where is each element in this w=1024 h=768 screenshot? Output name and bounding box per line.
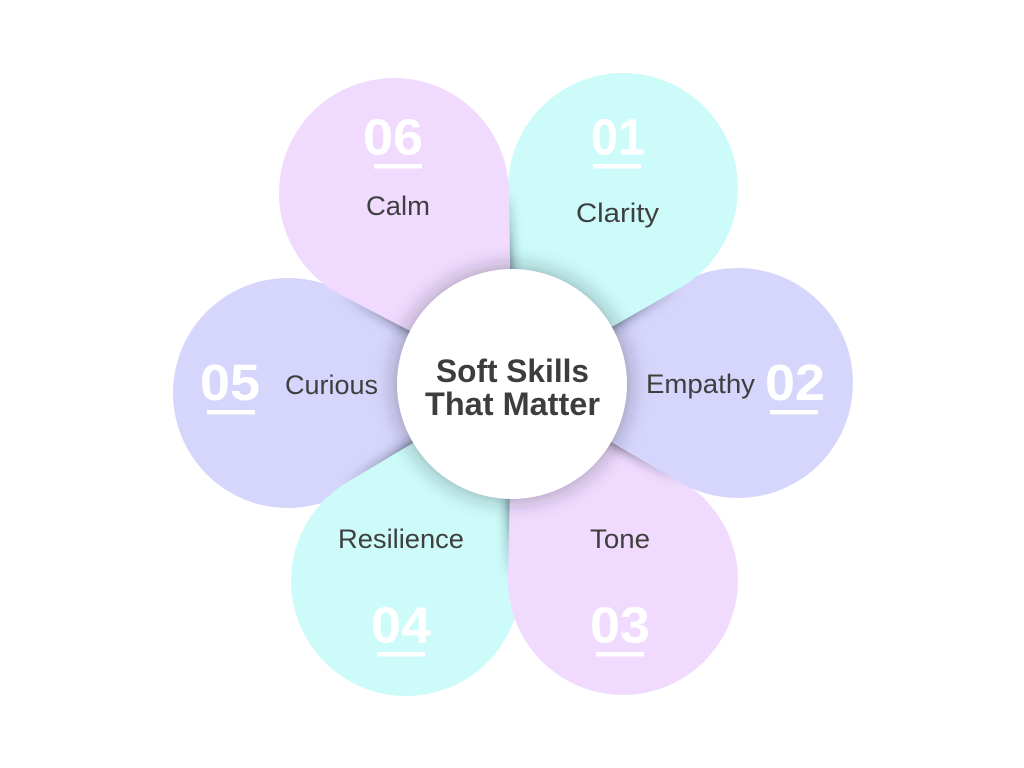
number: 02: 02 [765, 354, 825, 411]
petal 04: Resilience [291, 384, 521, 696]
title [425, 353, 600, 422]
label: Resilience: Resilience [338, 524, 464, 554]
number: 03: 03 [590, 596, 650, 654]
petal 03: Tone [508, 384, 738, 695]
label: Empathy: Empathy [646, 369, 755, 399]
label: Tone: Tone [590, 524, 650, 554]
label: Clarity: Clarity [576, 198, 660, 228]
number: 05: 05 [200, 354, 260, 411]
title: That Matter [425, 386, 600, 422]
label: Curious: Curious [285, 370, 378, 400]
label: Calm: Calm [366, 191, 430, 221]
title: Soft Skills [436, 353, 589, 389]
number: 01: 01 [591, 108, 645, 166]
number: 06: 06 [363, 108, 423, 166]
center circle with title [396, 268, 628, 500]
petal 05: Curious [173, 278, 512, 508]
petal 02: Empathy [512, 268, 853, 498]
number: 04: 04 [371, 596, 432, 654]
petal 01: Clarity [508, 73, 738, 384]
petal 06: Calm [279, 78, 512, 384]
